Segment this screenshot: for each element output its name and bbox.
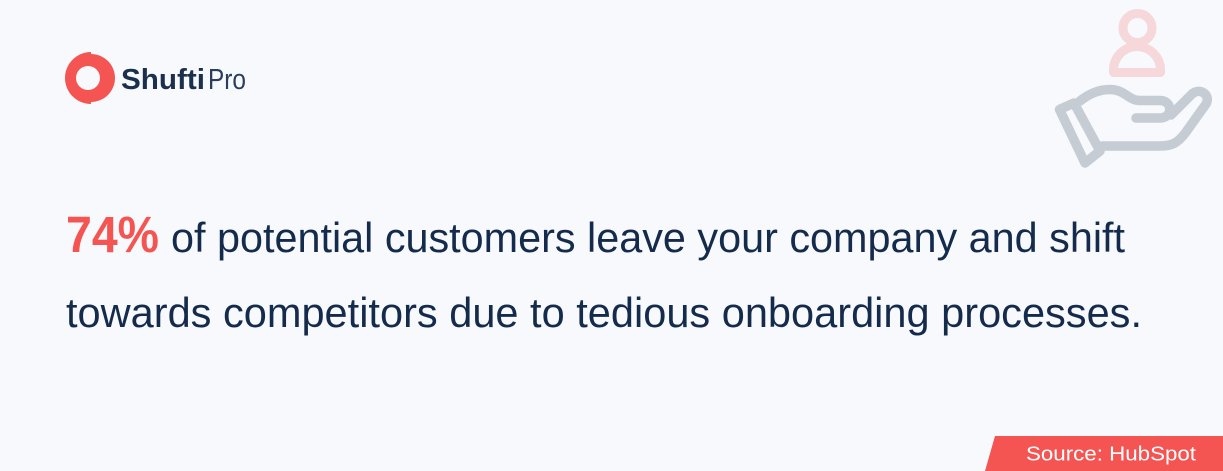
badge background — [985, 436, 1223, 471]
logo wordmark: Shufti — [121, 64, 205, 96]
line 1 with highlighted statistic: of potential customers leave your company and shift — [171, 214, 1125, 261]
logo: Shufti Pro — [65, 52, 246, 104]
logo wordmark: Pro — [208, 64, 246, 96]
icon: person on open hand — [1060, 14, 1207, 163]
source label: Source: HubSpot — [1026, 444, 1196, 466]
line 2: towards competitors due to tedious onboarding processes. — [66, 289, 1142, 336]
icon: open hand — [1060, 90, 1207, 163]
source badge — [985, 436, 1223, 471]
line 1 with highlighted statistic: 74% — [66, 206, 159, 263]
icon: logo ring — [65, 52, 115, 104]
icon: person — [1114, 14, 1160, 72]
main statement text — [66, 206, 1142, 336]
